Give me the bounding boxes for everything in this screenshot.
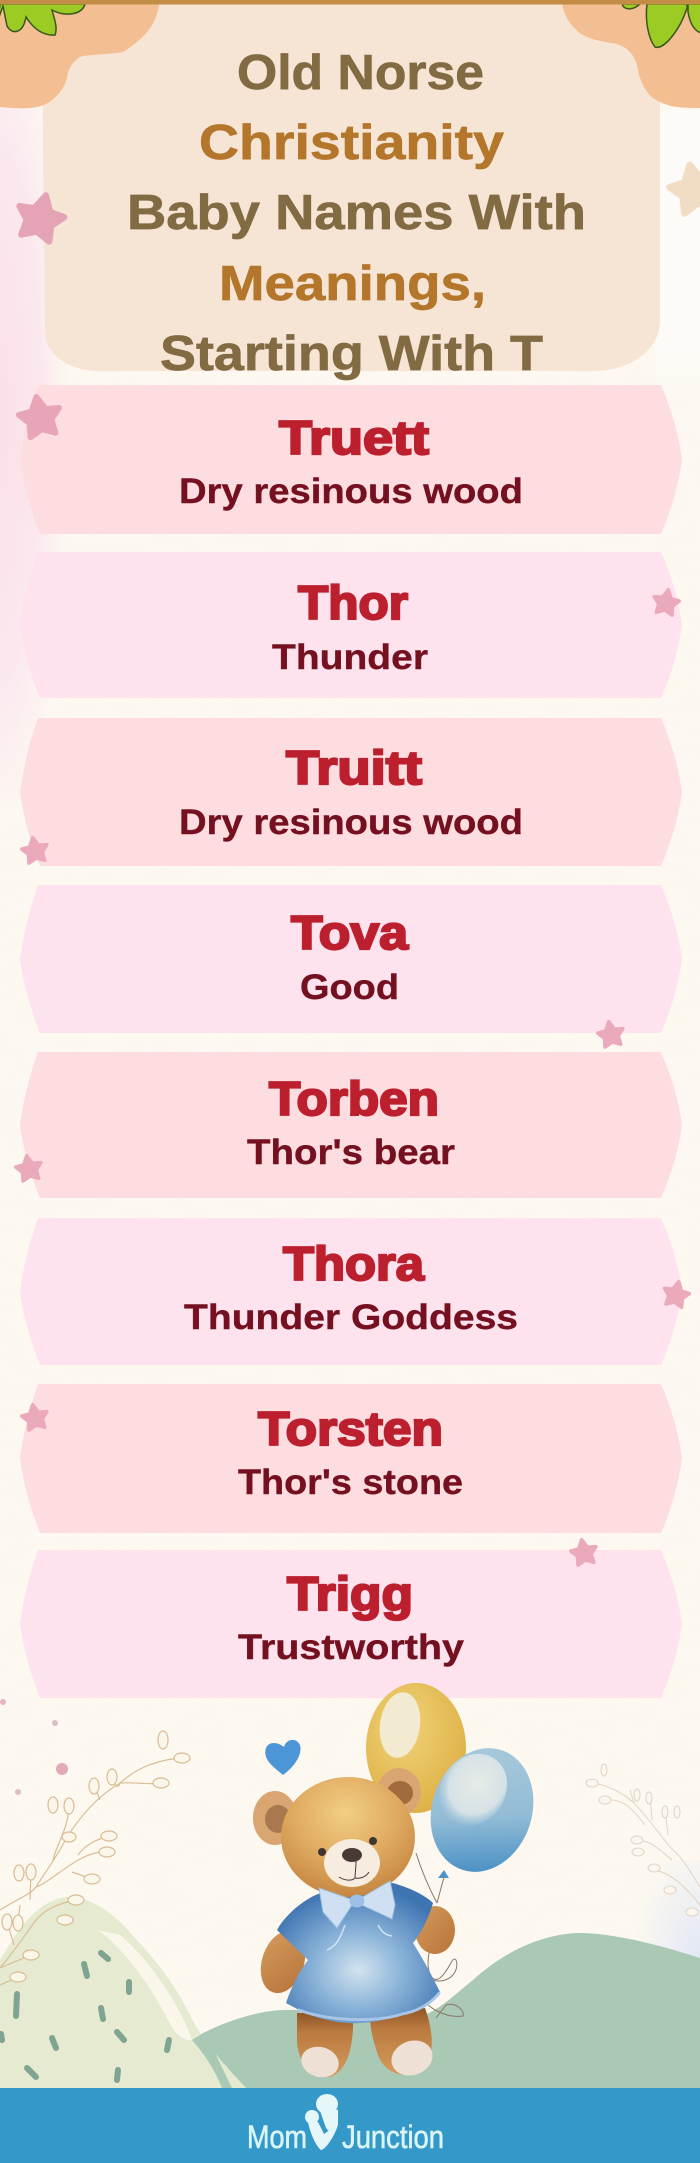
band: Tova: Tova bbox=[291, 906, 409, 959]
logo: MomJunction: Junction bbox=[342, 2119, 444, 2155]
band: Trigg: Trustworthy bbox=[238, 1628, 465, 1667]
left arm bbox=[253, 1925, 313, 1999]
bear face bbox=[318, 1837, 380, 1887]
band: Truett: Dry resinous wood bbox=[179, 472, 523, 511]
leaves: left bbox=[0, 4, 85, 35]
illustration: teddy bear with balloons bbox=[253, 1683, 549, 2081]
left branch with buds bbox=[0, 1731, 190, 1985]
band: Thora: Thunder Goddess bbox=[184, 1298, 518, 1337]
band: Truitt bbox=[20, 718, 682, 866]
star: beige right bbox=[666, 160, 700, 215]
top bar bbox=[0, 0, 700, 4]
band: Trigg bbox=[20, 1550, 682, 1698]
title panel bbox=[0, 0, 700, 371]
band: Trigg: Trigg bbox=[287, 1567, 413, 1620]
band: Truitt: Truitt bbox=[286, 741, 422, 794]
hills bbox=[0, 1897, 700, 2088]
dress bbox=[277, 1883, 440, 2023]
decorative dots bbox=[0, 1699, 68, 1795]
band: Thor: Thor bbox=[298, 576, 408, 629]
icon: blue balloon bbox=[415, 1735, 549, 1885]
right leg bbox=[370, 2008, 432, 2075]
title bbox=[127, 46, 586, 381]
icon: blue heart bbox=[265, 1740, 301, 1775]
hill: sage green bbox=[192, 1933, 700, 2088]
band: Torsten: Torsten bbox=[258, 1402, 443, 1455]
band: Tova: Good bbox=[300, 968, 399, 1007]
logo: MomJunction: Mom bbox=[247, 2119, 307, 2155]
title: Meanings, bbox=[219, 257, 486, 311]
right branch with buds bbox=[586, 1764, 700, 1916]
band: Thor: Thunder bbox=[272, 638, 428, 677]
title: Christianity bbox=[199, 116, 504, 170]
footer bar bbox=[0, 2088, 700, 2163]
band: Truett: Truett bbox=[279, 411, 429, 464]
band: Torben: Torben bbox=[269, 1072, 439, 1125]
band: Torben: Thor's bear bbox=[247, 1133, 455, 1172]
band: Truett bbox=[20, 385, 682, 534]
band: Torben bbox=[20, 1052, 682, 1198]
band: Thora: Thora bbox=[283, 1237, 425, 1290]
title: Starting With T bbox=[160, 327, 543, 381]
corner blob: left bbox=[0, 4, 159, 108]
logo: MomJunction bbox=[247, 2094, 444, 2155]
leaves: right bbox=[622, 4, 700, 47]
band: Thora bbox=[20, 1218, 682, 1365]
bear head bbox=[281, 1777, 415, 1897]
band: Torsten: Thor's stone bbox=[238, 1463, 463, 1502]
left leg bbox=[297, 2013, 353, 2077]
logo silhouette bbox=[305, 2094, 338, 2150]
foot pads bbox=[298, 2035, 438, 2081]
balloon strings bbox=[416, 1853, 463, 2018]
title: Baby Names With bbox=[127, 186, 586, 240]
corner blob: right bbox=[562, 4, 700, 108]
right arm bbox=[415, 1906, 455, 1954]
icon: yellow balloon bbox=[366, 1683, 466, 1813]
bow tie bbox=[319, 1881, 395, 1928]
band: Tova bbox=[20, 885, 682, 1033]
stars bbox=[13, 190, 691, 1566]
ears bbox=[253, 1768, 421, 1845]
band: Truitt: Dry resinous wood bbox=[179, 803, 523, 842]
title: Old Norse bbox=[237, 46, 484, 100]
hill: pale yellow-green with dashes bbox=[0, 1897, 246, 2088]
band: Thor bbox=[20, 552, 682, 698]
band: Torsten bbox=[20, 1384, 682, 1533]
